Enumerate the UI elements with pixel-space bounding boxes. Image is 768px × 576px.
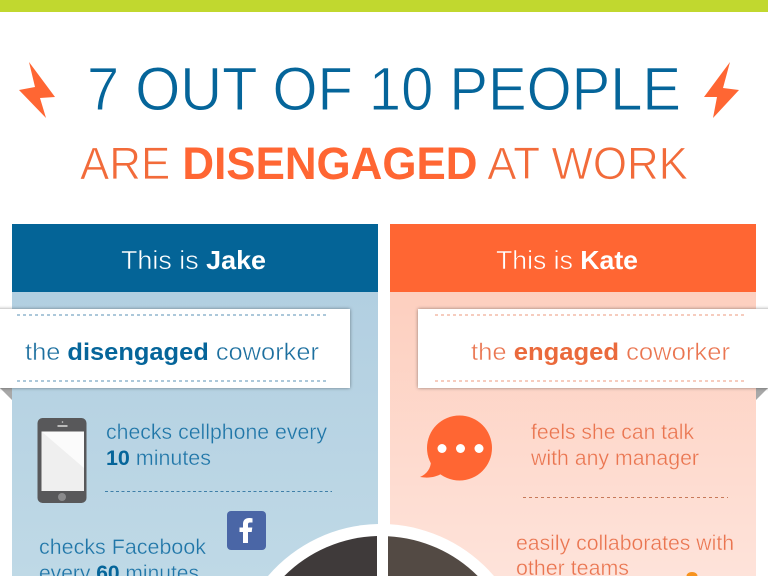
- text: 10 minutes: 10 minutes: [106, 447, 211, 470]
- icon: left lightning bolt: [19, 62, 55, 118]
- panel: Kate: [390, 224, 756, 576]
- icon: Facebook: [227, 511, 266, 550]
- ribbon: engaged coworker: the engaged coworker: [471, 339, 730, 366]
- text: easily collaborates: easily collaborates with: [516, 532, 734, 555]
- top green bar: [0, 0, 768, 12]
- text: checks cellphone: checks cellphone every: [106, 421, 327, 444]
- icon: orange dot: [686, 572, 698, 576]
- ribbon: disengaged coworker: [0, 309, 350, 400]
- Jake header: [12, 224, 378, 292]
- title: 7 OUT OF 10 PEOPLE: [87, 55, 681, 123]
- divider: Kate: [523, 496, 728, 498]
- ribbon: disengaged coworker: the disengaged coworker: [25, 339, 319, 366]
- text: checks Facebook: checks Facebook: [39, 536, 207, 559]
- icon: speech bubble: [420, 416, 492, 480]
- pie chart circle: [268, 524, 494, 576]
- icon: cellphone: [38, 418, 86, 503]
- divider: Jake: [105, 490, 332, 492]
- icon: right lightning bolt: [704, 62, 739, 118]
- panel: Jake: [12, 224, 378, 576]
- Kate header: This is Kate: [496, 245, 638, 275]
- text: feels she can talk: feels she can talk: [531, 421, 694, 444]
- ribbon: engaged coworker: [418, 309, 768, 400]
- Jake header: This is Jake: [121, 245, 266, 275]
- text: with any manager: with any manager: [530, 447, 699, 470]
- title: ARE DISENGAGED AT WORK: [80, 138, 688, 189]
- title: [80, 55, 688, 189]
- Kate header: [390, 224, 756, 292]
